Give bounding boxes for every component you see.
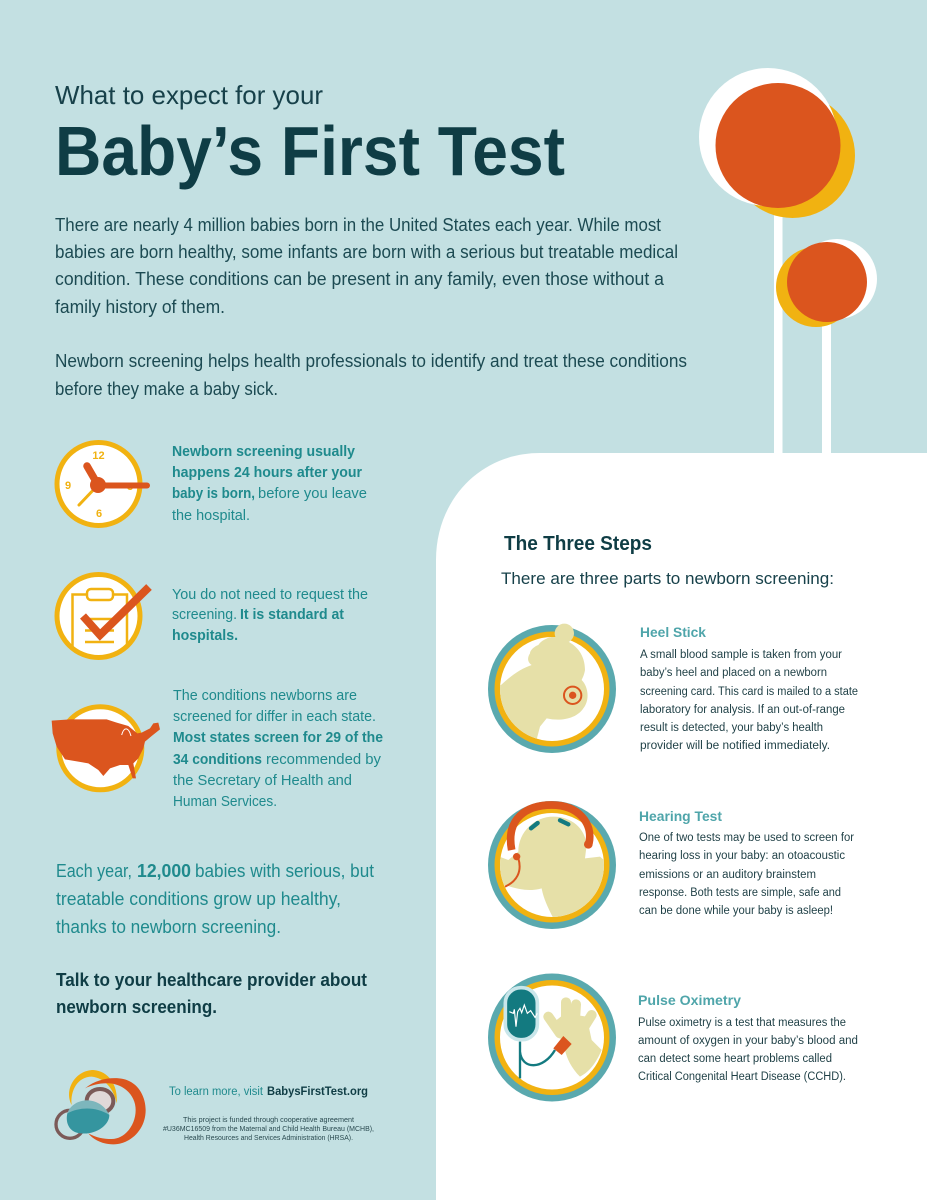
- text: 12,000 babies: thanks to newborn screening.: [56, 917, 281, 937]
- text: pulse oximetry: Pulse oximetry is a test that measures the: [638, 1017, 846, 1029]
- text: conditions differ by state: Most states screen for 29 of the: [173, 730, 383, 746]
- text: when screening happens: baby is born,: [172, 486, 255, 502]
- text: conditions differ by state: The conditions newborns are: [173, 688, 357, 704]
- text: when screening happens: before you leave: [258, 486, 367, 502]
- call to action: Talk to your healthcare provider about: [56, 970, 367, 990]
- text: conditions differ by state: Human Services.: [173, 794, 277, 810]
- text: conditions differ by state: recommended by: [266, 752, 382, 768]
- text: conditions differ by state: 34 conditions: [173, 752, 262, 768]
- text: standard at hospitals: You do not need to request the: [172, 587, 368, 603]
- text: heel stick: [640, 624, 858, 752]
- logo: [56, 1070, 146, 1144]
- icon: hearing test: [488, 801, 618, 929]
- text: pulse oximetry: Pulse Oximetry: [638, 992, 741, 1008]
- balloon sticks and circles: [699, 68, 877, 460]
- text: heel stick: Heel Stick: [640, 624, 706, 640]
- text: hearing test: hearing loss in your baby: an otoacoustic: [639, 850, 845, 862]
- text: conditions differ by state: the Secretary of Health and: [173, 773, 352, 789]
- text: pulse oximetry: can detect some heart problems called: [638, 1053, 832, 1065]
- intro text: Newborn screening helps health professionals to identify and treat these conditions: [55, 351, 687, 371]
- intro text: babies are born healthy, some infants are born with a serious but treatable medical: [55, 242, 678, 262]
- text: 12,000 babies: 12,000: [137, 861, 191, 881]
- call to action: [56, 970, 367, 1017]
- text: pulse oximetry: Critical Congenital Heart Disease (CCHD).: [638, 1071, 846, 1083]
- text: learn more: [169, 1086, 368, 1098]
- subtitle: What to expect for your: [55, 80, 323, 110]
- text: funding note: Health Resources and Services Administration (HRSA).: [184, 1135, 353, 1142]
- text: when screening happens: happens 24 hours after your: [172, 465, 362, 481]
- text: learn more: To learn more, visit: [169, 1086, 264, 1098]
- text: standard at hospitals: hospitals.: [172, 628, 238, 644]
- text: heel stick: screening card. This card is mailed to a state: [640, 686, 858, 698]
- text: when screening happens: Newborn screening usually: [172, 444, 355, 460]
- icon: pulse oximetry: [488, 974, 616, 1102]
- text: learn more: BabysFirstTest.org: [267, 1086, 368, 1098]
- icon: clock: 12: [92, 450, 105, 462]
- heading: the three steps: The Three Steps: [504, 533, 652, 555]
- text: funding note: This project is funded through cooperative agreement: [183, 1117, 354, 1124]
- intro text: There are nearly 4 million babies born in the United States each year. While most: [55, 215, 661, 235]
- text: when screening happens: [172, 444, 367, 524]
- text: heel stick: A small blood sample is taken from your: [640, 649, 842, 661]
- text: hearing test: Hearing Test: [639, 808, 722, 824]
- text: pulse oximetry: [638, 992, 858, 1083]
- text: conditions differ by state: screened for differ in each state.: [173, 709, 376, 725]
- icon: clock: 3: [127, 481, 133, 493]
- intro text: condition. These conditions can be present in any family, even those without a: [55, 269, 665, 289]
- icon: heel stick: [488, 624, 616, 753]
- text: heel stick: baby’s heel and placed on a newborn: [640, 667, 827, 679]
- text: 12,000 babies: babies with serious, but: [195, 861, 374, 881]
- text: standard at hospitals: It is standard at: [240, 607, 344, 623]
- icon: clock: 6: [96, 508, 102, 520]
- text: conditions differ by state: [173, 688, 383, 810]
- icon: clock: [57, 442, 147, 526]
- text: hearing test: [639, 808, 854, 917]
- text: heel stick: provider will be notified immediately.: [640, 740, 830, 752]
- text: heel stick: laboratory for analysis. If an out-of-range: [640, 704, 845, 716]
- text: when screening happens: the hospital.: [172, 508, 250, 524]
- icon: United States map: [52, 707, 160, 790]
- text: funding note: #U36MC16509 from the Maternal and Child Health Bureau (MCHB),: [163, 1126, 374, 1133]
- icon: clock: 9: [65, 480, 71, 492]
- text: hearing test: can be done while your baby is asleep!: [639, 905, 833, 917]
- title: Baby’s First Test: [55, 112, 565, 190]
- text: 12,000 babies: [56, 861, 374, 937]
- text: funding note: [163, 1117, 374, 1142]
- intro text: [55, 215, 687, 399]
- text: hearing test: One of two tests may be used to screen for: [639, 832, 854, 844]
- intro text: family history of them.: [55, 297, 225, 317]
- text: heel stick: result is detected, your baby’s health: [640, 722, 823, 734]
- white panel: [436, 453, 927, 1200]
- text: 12,000 babies: Each year,: [56, 861, 132, 881]
- text: hearing test: emissions or an auditory brainstem: [639, 869, 816, 881]
- text: pulse oximetry: amount of oxygen in your baby’s blood and: [638, 1035, 858, 1047]
- text: 12,000 babies: treatable conditions grow up healthy,: [56, 889, 341, 909]
- intro text: before they make a baby sick.: [55, 379, 278, 399]
- icon: clipboard with check: [57, 574, 149, 658]
- subheading: There are three parts to newborn screening:: [501, 569, 834, 588]
- text: hearing test: response. Both tests are simple, safe and: [639, 887, 841, 899]
- text: standard at hospitals: [172, 587, 368, 644]
- call to action: newborn screening.: [56, 997, 217, 1017]
- text: standard at hospitals: screening.: [172, 607, 237, 623]
